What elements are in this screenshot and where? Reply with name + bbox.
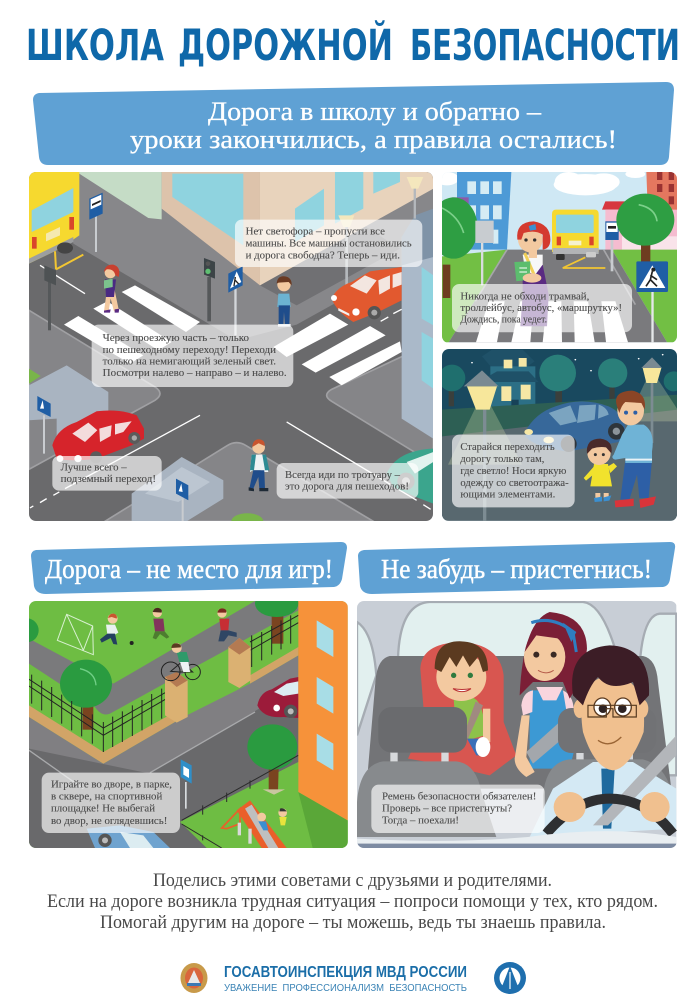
traffic light centre xyxy=(204,258,215,321)
closing text: Если на дороге возникла трудная ситуация – попроси помощи у тех, кто рядом. xyxy=(47,892,658,912)
dark red car xyxy=(257,677,298,718)
banner: road to school xyxy=(33,82,674,165)
teal car xyxy=(387,448,433,503)
left window xyxy=(357,622,377,735)
orange car xyxy=(331,267,402,322)
road edge lines xyxy=(475,250,635,305)
boy 2 xyxy=(153,608,169,639)
beige building xyxy=(162,172,433,285)
blue building xyxy=(452,172,511,250)
callout: underpass: подземный переход! xyxy=(61,474,156,485)
asphalt roads xyxy=(29,172,433,521)
dashboard xyxy=(357,831,677,848)
back of sign xyxy=(475,221,493,286)
panel: crossroads xyxy=(29,172,433,521)
yellow stop markings xyxy=(562,258,605,268)
callout: seat belt: Проверь – все пристегнуты? xyxy=(382,803,513,814)
panel: do not walk around the bus xyxy=(442,172,677,342)
callout: play safely: Играйте во дворе, в парке, xyxy=(51,779,172,790)
street lamp right xyxy=(641,358,662,443)
boy walking xyxy=(249,439,269,491)
callout: be visible at night: дорогу только там, xyxy=(460,454,544,465)
tan walls xyxy=(29,647,298,763)
red building xyxy=(646,172,677,235)
panel: playground xyxy=(29,601,348,848)
callout: no traffic light: машины. Все машины остановились xyxy=(246,238,412,249)
house xyxy=(482,350,538,410)
child seat xyxy=(408,642,517,775)
child xyxy=(435,641,491,757)
callout: be visible at night: одежду со светоотража- xyxy=(460,478,569,489)
callout: sidewalk xyxy=(277,463,418,498)
pedestrian crossing sign xyxy=(636,262,668,343)
callout: bus xyxy=(452,284,632,333)
callout: be visible at night: где светло! Носи яркую xyxy=(460,466,566,477)
logo text: state inspection: ГОСАВТОИНСПЕКЦИЯ МВД РОССИИ xyxy=(224,964,467,981)
tree by building xyxy=(247,724,297,794)
callout: crossing: Через проезжую часть – только xyxy=(103,333,249,344)
callout: sidewalk: Всегда иди по тротуару – xyxy=(285,470,401,481)
callout: crossing: Посмотри налево – направо – и налево. xyxy=(103,368,287,379)
green building xyxy=(77,172,162,219)
crossing stripes xyxy=(476,302,628,343)
underpass entrance left xyxy=(29,365,108,453)
front left seat xyxy=(357,761,497,837)
steering wheel and hands xyxy=(547,792,673,833)
grass xyxy=(442,250,677,343)
banner: road is not for games: Дорога – не место для игр! xyxy=(45,554,333,584)
top sidewalk xyxy=(63,172,433,340)
boy in blue jacket xyxy=(612,391,656,508)
left sidewalk xyxy=(29,310,160,469)
girl with book xyxy=(104,264,119,312)
bus stop sign xyxy=(605,222,618,272)
girl in yellow xyxy=(583,439,617,502)
banner: fasten your belt xyxy=(358,542,675,594)
car interior background xyxy=(357,601,677,848)
woman passenger xyxy=(515,612,587,777)
rear window xyxy=(398,602,618,658)
parking sign xyxy=(181,759,192,808)
asphalt road xyxy=(29,685,298,848)
slide xyxy=(222,800,287,848)
right tree xyxy=(616,194,674,263)
driver xyxy=(530,645,677,837)
callout: bus: троллейбус, автобус, «маршрутку»! xyxy=(460,303,622,314)
callout: bus: Никогда не обходи трамвай, xyxy=(460,292,589,303)
boy with ball 1 xyxy=(100,613,134,645)
bus stop sign xyxy=(89,192,103,252)
park path xyxy=(29,601,298,714)
callout: be visible at night: ющими элементами. xyxy=(460,490,555,501)
bus xyxy=(29,172,79,263)
closing text xyxy=(47,871,658,933)
left tree xyxy=(60,659,112,729)
street lamps xyxy=(338,177,423,285)
goal xyxy=(57,614,93,654)
logo text: state inspection: УВАЖЕНИЕ ПРОФЕССИОНАЛИЗМ БЕЗОПАСНОСТЬ xyxy=(224,983,467,994)
clouds xyxy=(435,170,645,196)
lower grass xyxy=(180,762,348,848)
logo: road movement circle xyxy=(494,962,526,994)
back seat xyxy=(367,656,672,788)
right blue building xyxy=(402,208,433,438)
stars xyxy=(471,354,663,372)
front right headrest xyxy=(543,708,673,828)
yellow stop marking xyxy=(55,251,83,269)
right window xyxy=(640,613,677,775)
callout: no traffic light: и дорога свободна? Теперь – иди. xyxy=(246,250,400,261)
road kerb line xyxy=(29,712,255,788)
night sky xyxy=(442,349,677,521)
street lamp left xyxy=(463,371,498,521)
crossing stripes xyxy=(64,285,402,385)
fences xyxy=(29,615,298,752)
building shadow xyxy=(260,218,400,305)
bus xyxy=(552,210,598,260)
underpass entrance bottom xyxy=(132,457,263,529)
callout: play safely: в сквере, на спортивной xyxy=(51,791,163,802)
banner: road is not for games xyxy=(31,542,347,594)
callout: crossing: по пешеходному переходу! Переходи xyxy=(103,345,276,356)
trees xyxy=(438,355,683,407)
red car xyxy=(52,410,144,463)
callout: sidewalk: это дорога для пешеходов! xyxy=(285,481,409,492)
road xyxy=(448,250,667,343)
lane markings xyxy=(30,265,431,509)
panel: night crossing xyxy=(442,349,677,521)
grass xyxy=(29,601,348,848)
boy 3 xyxy=(217,608,237,641)
orange building xyxy=(298,601,348,820)
closing text: Помогай другим на дороге – ты можешь, ведь ты знаешь правила. xyxy=(100,913,606,933)
lower fence xyxy=(182,755,298,848)
logo text: state inspection xyxy=(224,964,467,994)
callout: underpass: Лучше всего – xyxy=(61,462,127,473)
pink kiosk xyxy=(602,202,677,253)
title xyxy=(26,20,680,71)
callout: no traffic light xyxy=(235,219,422,267)
title: ДОРОЖНОЙ xyxy=(178,20,393,71)
sidewalk xyxy=(29,655,298,792)
callout: play safely xyxy=(42,772,180,833)
callout: no traffic light: Нет светофора – пропусти все xyxy=(246,226,385,237)
logo: police emblem xyxy=(180,963,208,993)
callout: bus: Дождись, пока уедет. xyxy=(460,315,547,326)
night grass xyxy=(442,395,677,437)
blue car xyxy=(524,402,625,452)
sky xyxy=(442,172,677,343)
callout: play safely: во двор, не оглядевшись! xyxy=(51,816,167,827)
callout: be visible at night xyxy=(452,435,574,508)
right sidewalk xyxy=(327,342,433,463)
callout: seat belt: Ремень безопасности обязателен! xyxy=(382,791,537,802)
callout: play safely: площадке! Не выбегай xyxy=(51,803,155,814)
callout: be visible at night: Старайся переходить xyxy=(460,442,554,453)
top tree xyxy=(15,590,298,643)
light blue car xyxy=(87,825,170,848)
boy waiting xyxy=(277,276,292,326)
banner: fasten your belt: Не забудь – пристегнись! xyxy=(381,554,652,584)
cyclist xyxy=(161,643,200,680)
callout: underpass xyxy=(52,456,162,490)
light cones xyxy=(448,378,677,465)
title: ШКОЛА xyxy=(26,21,165,71)
callout: crossing xyxy=(92,324,293,387)
road xyxy=(442,410,677,521)
pedestrian crossing sign xyxy=(228,266,243,335)
banner: road to school: Дорога в школу и обратно – xyxy=(208,96,542,126)
girl with book xyxy=(514,222,550,327)
bottom sidewalk xyxy=(105,442,373,521)
panel: car interior xyxy=(357,601,677,848)
callout: seat belt xyxy=(372,784,545,833)
callout: seat belt: Тогда – поехали! xyxy=(382,815,459,826)
left tree xyxy=(429,198,477,298)
traffic light left xyxy=(44,265,56,330)
banner: road to school: уроки закончились, а правила остались! xyxy=(130,124,617,154)
callout: crossing: только на немигающий зеленый свет. xyxy=(103,356,276,367)
closing text: Поделись этими советами с друзьями и родителями. xyxy=(153,871,552,891)
gate pillars xyxy=(165,638,251,722)
front left headrest xyxy=(379,707,467,762)
